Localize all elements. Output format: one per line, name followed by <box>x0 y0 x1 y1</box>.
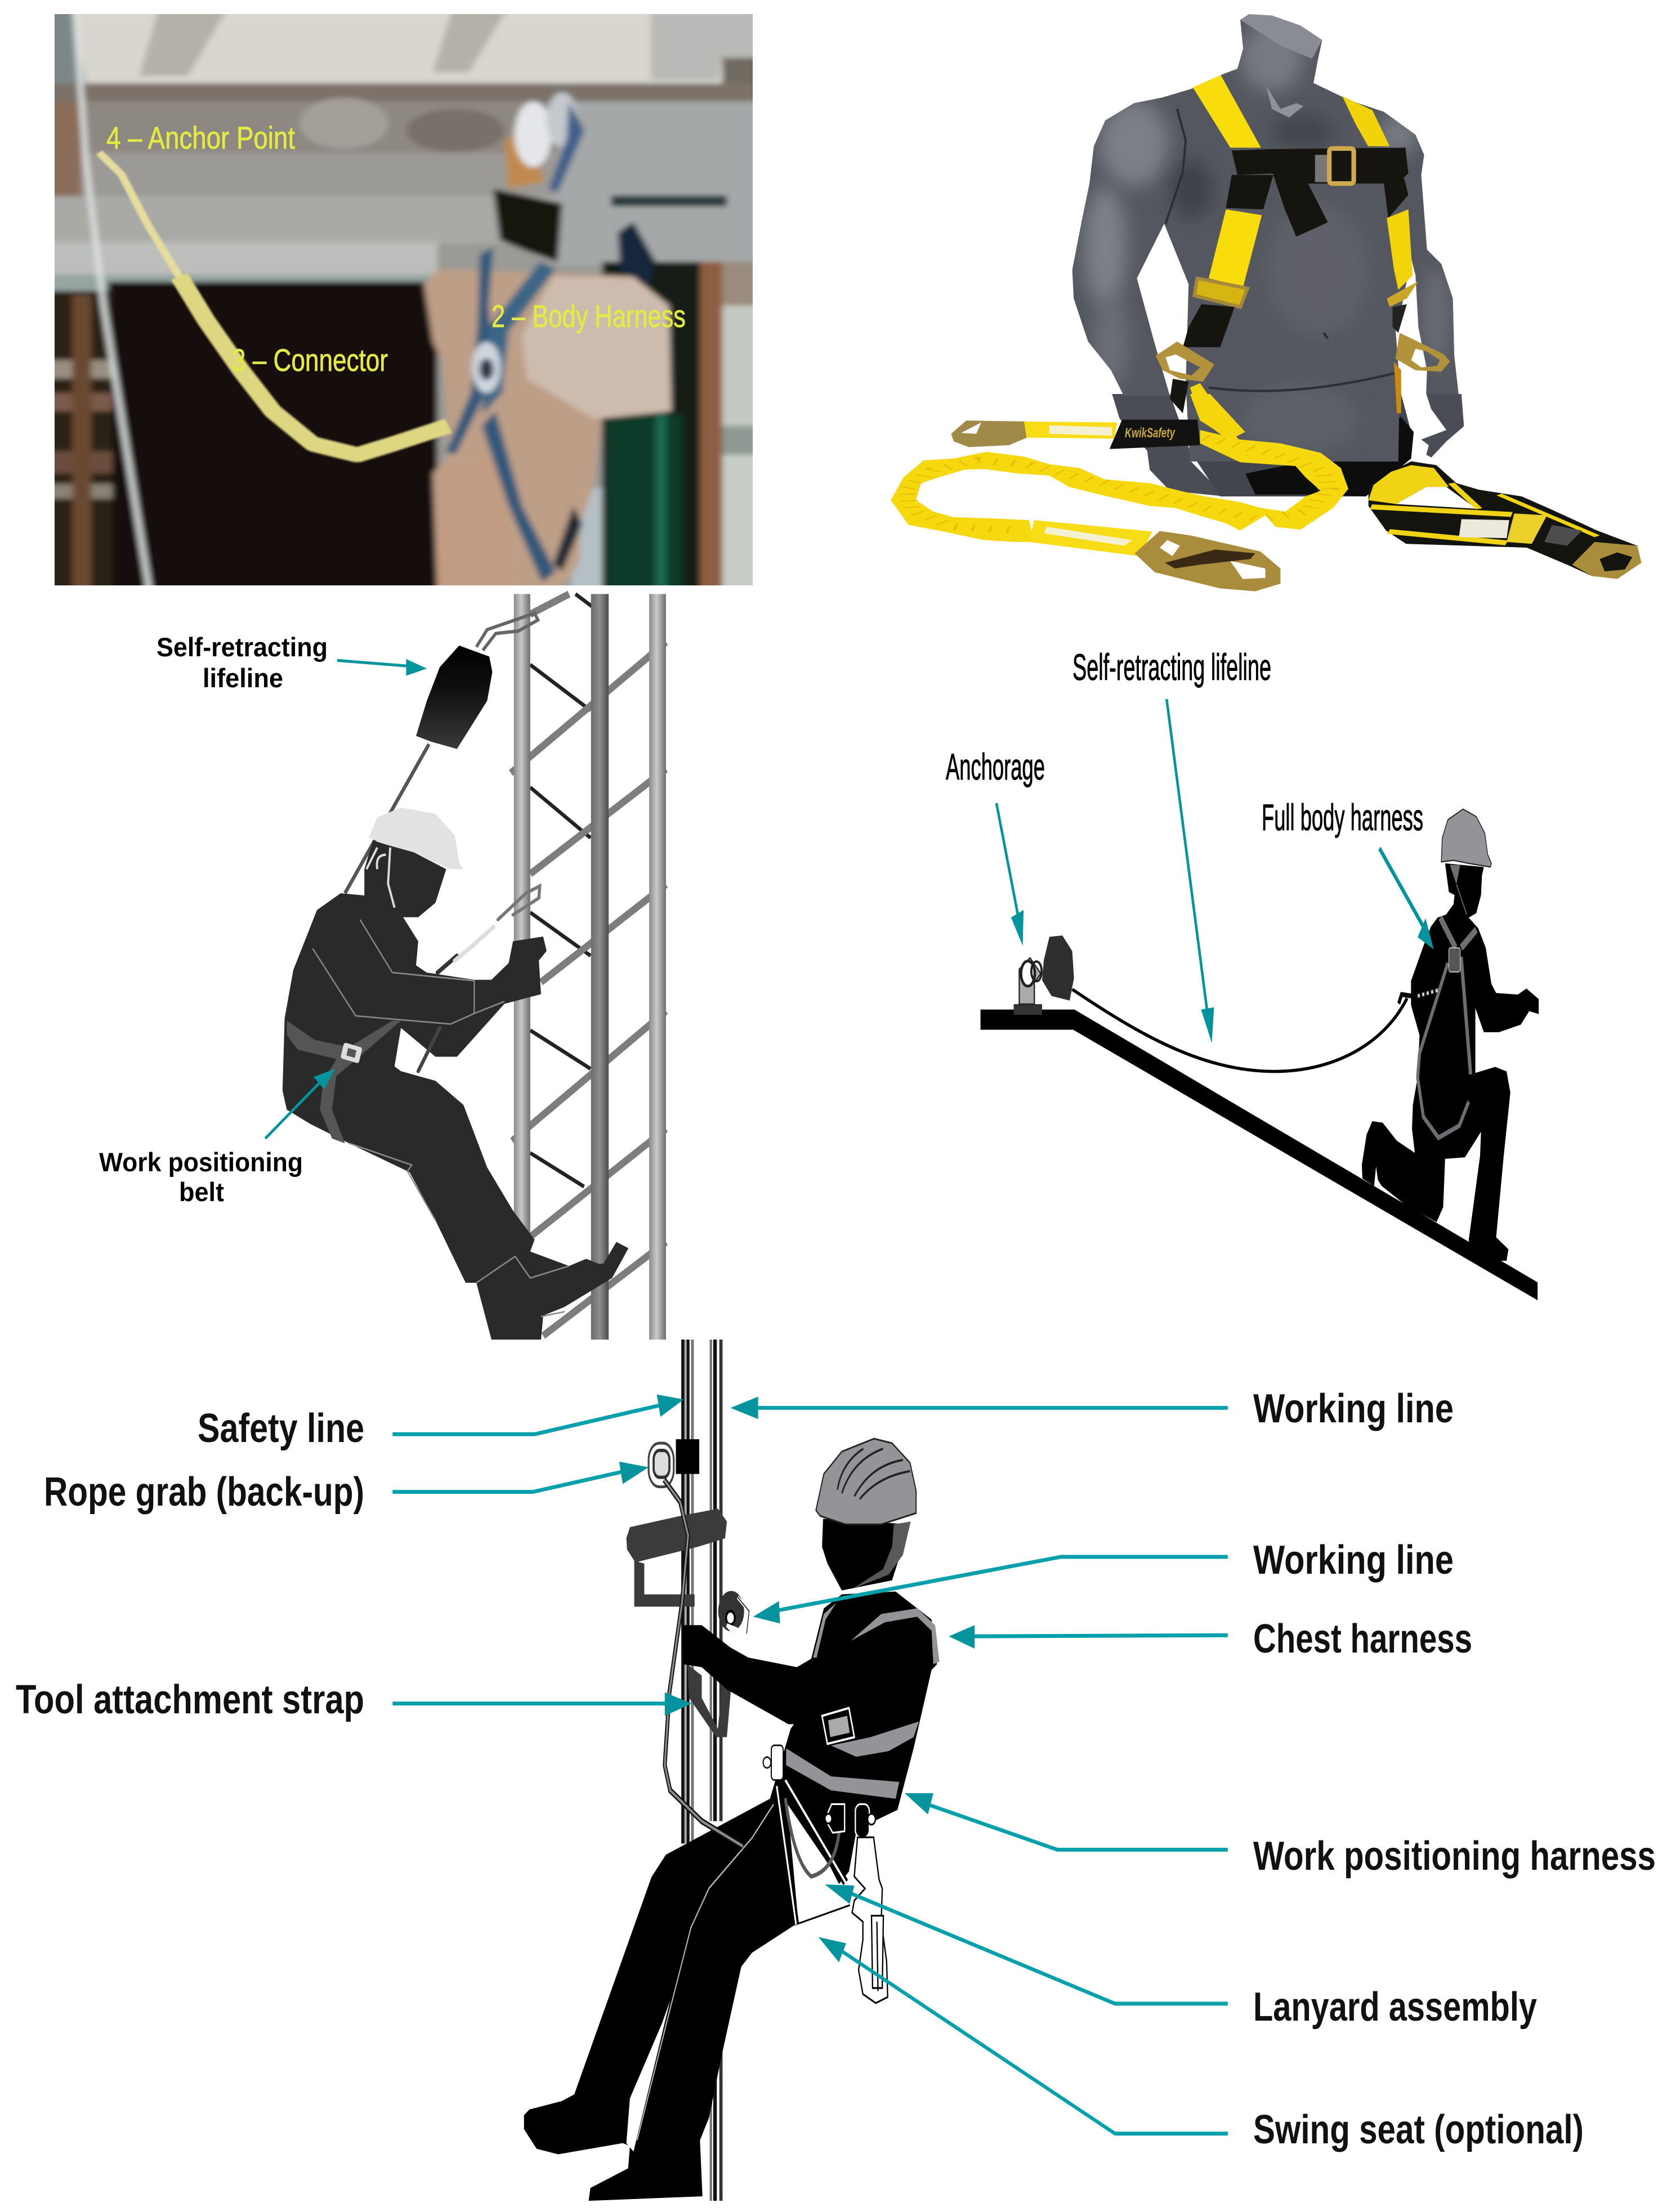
arrow: chest harness <box>949 1625 1228 1649</box>
photo scene <box>37 0 771 601</box>
torso <box>1065 11 1464 462</box>
swing seat fabric <box>788 1804 849 1922</box>
lanyard cord <box>664 1480 743 1846</box>
worker legs and torso <box>524 1592 937 2201</box>
seat edge <box>795 1905 850 1925</box>
right D-ring <box>1396 333 1450 371</box>
label: self-retracting lifeline <box>157 632 328 693</box>
chest harness straps <box>851 1609 940 1664</box>
label arrow: work positioning belt <box>265 1069 335 1139</box>
label: anchorage: Anchorage <box>946 746 1045 787</box>
arrow: full body harness <box>1379 848 1434 950</box>
dorsal buckle <box>1449 948 1460 972</box>
leg seam <box>637 1804 774 2141</box>
label arrow: self-retracting lifeline <box>337 659 427 676</box>
label: rope grab: Rope grab (back-up) <box>44 1470 364 1515</box>
label: work positioning belt: belt <box>179 1177 224 1207</box>
rope grab <box>649 1439 699 1487</box>
head and mask <box>493 189 562 262</box>
panel: ladder climber with self-retracting lifeline <box>99 594 666 1340</box>
chest strap <box>1232 147 1409 183</box>
panel: photo of worker with labelled fall-arrest system <box>37 0 771 601</box>
label: full body harness: Full body harness <box>1262 796 1423 838</box>
helmet <box>816 1439 916 1524</box>
arrow: working line top <box>730 1396 1228 1419</box>
teal arrows <box>392 1394 1228 2134</box>
arrow: rope grab <box>392 1462 649 1492</box>
climber body <box>283 840 604 1340</box>
tool strap <box>687 1653 734 1737</box>
upper reflective strip <box>1049 426 1112 436</box>
strap below D-ring <box>1170 379 1188 413</box>
label: working line top: Working line <box>1253 1386 1454 1431</box>
upper webbing <box>1024 422 1117 438</box>
rear boot <box>530 1242 628 1317</box>
hanging tab <box>1273 163 1328 237</box>
illustration: sloped roof and anchor <box>981 699 1538 1300</box>
lower sleeve <box>1029 520 1152 556</box>
helmet <box>1441 809 1491 867</box>
lanyard end <box>1398 995 1412 1004</box>
anchor strap <box>1369 462 1642 579</box>
label: self-retracting lifeline: Self-retracting lifeline <box>1072 646 1271 688</box>
left strap lower <box>1226 175 1273 209</box>
brand name on sleeve: KwikSafety <box>1125 426 1176 441</box>
illustration: kneeling worker <box>1362 809 1539 1261</box>
helmet strap <box>367 848 395 908</box>
arrow: swing seat <box>819 1937 1228 2134</box>
worker body <box>1362 863 1539 1261</box>
chest reflective patch <box>1315 155 1328 182</box>
positioning belt <box>287 1020 401 1143</box>
label: work positioning belt <box>99 1147 303 1207</box>
tower pipes <box>514 594 530 1340</box>
mannequin lower body and hands <box>1112 394 1464 496</box>
waist ring and tie point <box>763 1721 794 1780</box>
self-retracting device <box>416 646 492 749</box>
mannequin torso and harness <box>1065 11 1464 462</box>
upper hook <box>476 614 538 650</box>
descender device <box>718 1591 750 1656</box>
arrow: work positioning harness <box>905 1793 1228 1850</box>
label: chest harness: Chest harness <box>1253 1617 1472 1662</box>
label: work positioning belt: Work positioning <box>99 1147 303 1177</box>
label: anchor point: 4 – Anchor Point <box>106 120 295 155</box>
lanyard and anchor strap <box>891 394 1642 591</box>
left D-ring <box>1156 342 1214 382</box>
arrow: anchorage <box>996 803 1024 946</box>
harness straps <box>1418 917 1476 1138</box>
belt buckle <box>341 1042 363 1064</box>
arrow: lanyard assembly <box>825 1884 1228 2004</box>
chest buckle <box>1329 149 1354 183</box>
lower snap hook <box>1134 531 1280 591</box>
lifeline cable <box>1072 989 1407 1072</box>
rope lines <box>681 1340 722 2201</box>
label: safety line: Safety line <box>198 1406 364 1451</box>
label: self-retracting lifeline: Self-retracting <box>157 632 328 662</box>
left lower webbing <box>1183 304 1235 347</box>
chest buckle <box>822 1708 855 1744</box>
sloped roof <box>981 1010 1538 1300</box>
arrow: working line descender <box>753 1557 1228 1623</box>
panel: mannequin wearing yellow harness with lanyard <box>891 11 1642 591</box>
side strap <box>1394 361 1401 413</box>
label: working line second: Working line <box>1253 1538 1454 1583</box>
illustration: tower and climber <box>265 594 666 1340</box>
panel: roof worker with anchorage and self-retracting lifeline <box>946 646 1539 1300</box>
black brand sleeve <box>1110 419 1200 449</box>
helmet <box>369 808 463 869</box>
seat straps <box>777 1780 846 1925</box>
harness straps <box>446 247 493 455</box>
climber seam lines <box>312 920 569 1317</box>
arrow: safety line <box>392 1394 684 1434</box>
elastic lanyard <box>891 430 1348 542</box>
hook latch <box>1165 549 1255 568</box>
waist rigging, swing seat and carabiners <box>763 1721 888 2003</box>
arrow: tool attachment strap <box>392 1692 692 1716</box>
positioning lanyard and snaps <box>418 886 540 1071</box>
helmet neck flap <box>852 1521 911 1589</box>
tool bag and bracket <box>627 1508 727 1607</box>
hanging carabiners <box>825 1804 888 2003</box>
anchor bracket <box>1014 958 1042 1015</box>
tower struts <box>511 594 666 1336</box>
label: connector: 3 – Connector <box>232 342 388 378</box>
right strap lower <box>1384 178 1409 218</box>
label: swing seat: Swing seat (optional) <box>1253 2107 1584 2152</box>
retractable device <box>1042 935 1074 1001</box>
harness upper straps <box>1193 75 1261 147</box>
label: tool attachment strap: Tool attachment strap <box>16 1677 364 1722</box>
lifeline cable <box>345 744 429 893</box>
body <box>424 269 671 597</box>
lower reflective strip <box>1044 527 1132 546</box>
arrow: self-retracting lifeline <box>1167 699 1214 1043</box>
gray cord <box>785 1798 839 1877</box>
upper snap hook <box>951 420 1031 447</box>
yellow leg strap over sleeve <box>1190 394 1245 440</box>
gap between legs <box>627 2000 670 2152</box>
left lower buckle <box>1194 278 1248 307</box>
panel: rope access worker <box>16 1340 1656 2201</box>
label: lanyard assembly: Lanyard assembly <box>1253 1985 1537 2030</box>
label: body harness: 2 – Body Harness <box>491 298 686 334</box>
waist strap <box>786 1748 899 1799</box>
rope <box>75 3 150 597</box>
illustration: rope access worker <box>524 1340 940 2201</box>
label: self-retracting lifeline: lifeline <box>203 663 283 693</box>
chin strap <box>1450 865 1460 884</box>
head <box>822 1519 910 1591</box>
lanyard <box>99 153 449 455</box>
